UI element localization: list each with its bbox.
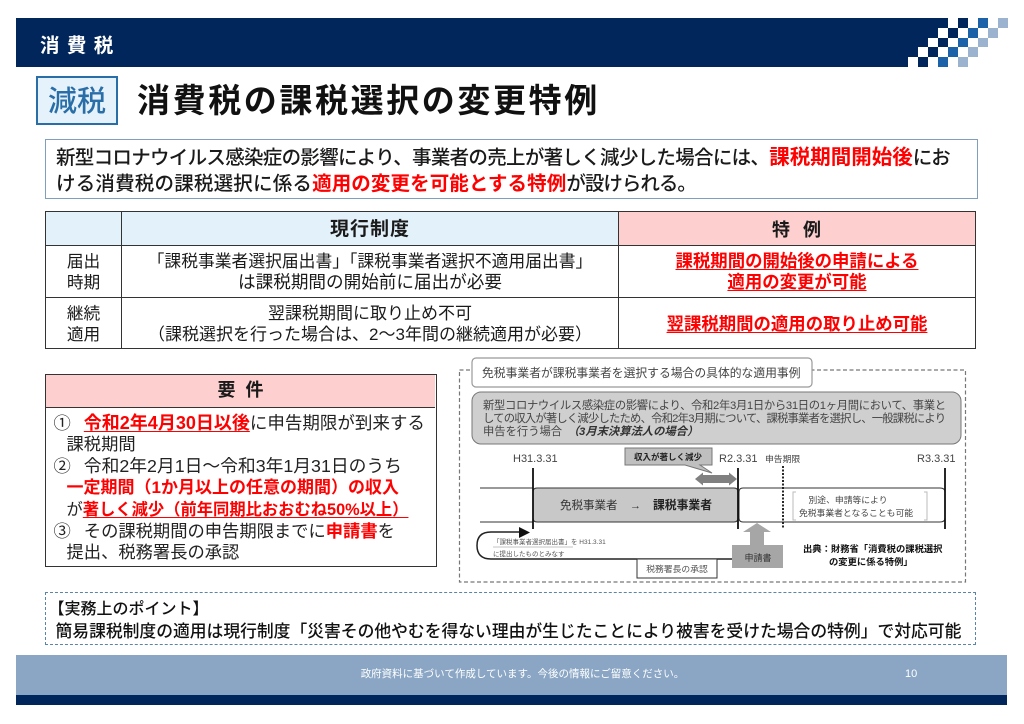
timeline following period bar [739, 488, 945, 522]
tax cut badge: 減税 [48, 86, 106, 118]
current system filing time: 「課税事業者選択届出書」「課税事業者選択不適用届出書」 [148, 252, 592, 271]
requirements panel [45, 374, 437, 567]
case description: 申告を行う場合 （3月末決算法人の場合） [483, 425, 698, 438]
special case filing time: 適用の変更が可能 [727, 272, 867, 292]
requirements heading: 要 件 [217, 380, 264, 400]
special case continued application [618, 297, 976, 349]
diagram heading: 免税事業者が課税事業者を選択する場合の具体的な適用事例 [482, 366, 801, 380]
table header special case: 特 例 [772, 220, 822, 240]
intro text box: 新型コロナウイルス感染症の影響により、事業者の売上が著しく減少した場合には、課税期間開始後にお [56, 146, 950, 169]
current system filing time [121, 245, 619, 298]
timeline tax-exempt to taxable bar: 免税事業者 [560, 498, 618, 512]
footer band [16, 655, 1007, 695]
special case filing time [618, 245, 976, 298]
row label continued application: 継続 [67, 304, 100, 323]
requirements list: ② 令和2年2月1日～令和3年1月31日のうち [54, 456, 402, 476]
application form arrow [732, 523, 783, 568]
application form arrow: 申請書 [744, 552, 772, 563]
footer note: 政府資料に基づいて作成しています。今後の情報にご留意ください。 [361, 668, 684, 680]
comparison table [45, 211, 976, 349]
timeline dates [513, 453, 956, 465]
intro text box: ける消費税の課税選択に係る適用の変更を可能とする特例が設けられる。 [56, 173, 696, 195]
practical points box [45, 592, 976, 645]
practical points text: 【実務上のポイント】 [48, 601, 209, 618]
practical points text: 簡易課税制度の適用は現行制度「災害その他やむを得ない理由が生じたことにより被害を受けた場合の特例」で対応可能 [56, 622, 961, 641]
current system continued application: 翌課税期間に取り止め不可 [268, 304, 472, 323]
requirements list: ③ その課税期間の申告期限までに申請書を [54, 521, 395, 541]
requirements list: ① 令和2年4月30日以後に申告期限が到来する [54, 413, 425, 433]
requirements list [54, 413, 425, 562]
revenue drop callout: 収入が著しく減少 [634, 452, 702, 462]
special case continued application: 翌課税期間の適用の取り止め可能 [667, 314, 927, 334]
requirements list: 一定期間（1か月以上の任意の期間）の収入 [66, 478, 399, 497]
current system filing time: は課税期間の開始前に届出が必要 [238, 272, 502, 292]
case description: しての収入が著しく減少したため、令和2年3月期について、課税事業者を選択し、一般課税により [483, 411, 946, 425]
timeline following period bar: 免税事業者となることも可能 [799, 507, 913, 518]
row label filing time: 時期 [67, 273, 100, 292]
case description: 新型コロナウイルス感染症の影響により、令和2年3月1日から31日の1ヶ月間において、事業と [483, 398, 946, 412]
case description [472, 392, 961, 444]
table header blank cell [45, 211, 122, 246]
timeline dates: 申告期限 [765, 453, 800, 464]
header band with checker pattern [16, 18, 1008, 67]
tax cut badge [36, 76, 118, 125]
approval return arrow: 「課税事業者選択届出書」を H31.3.31 [493, 537, 606, 546]
revenue drop callout [625, 448, 712, 473]
timeline tax-exempt to taxable bar: 課税事業者 [653, 498, 712, 512]
applied example diagram [458, 357, 966, 583]
tax office approval box: 税務署長の承認 [646, 563, 708, 574]
diagram heading [472, 358, 812, 387]
table header current system [121, 211, 619, 246]
timeline dates: R3.3.31 [917, 453, 956, 465]
source note: 出典：財務省「消費税の課税選択 [803, 543, 943, 554]
source note: の変更に係る特例」 [829, 556, 913, 567]
approval return arrow: に提出したものとみなす [493, 549, 565, 558]
timeline dates: H31.3.31 [513, 453, 558, 465]
footer navy strip [16, 695, 1007, 705]
requirements list: 課税期間 [66, 434, 136, 454]
vertical timeline markers [533, 466, 945, 529]
requirements heading [46, 375, 435, 408]
current system continued application: （課税選択を行った場合は、2～3年間の継続適用が必要） [148, 325, 592, 344]
row label continued application: 適用 [67, 325, 100, 344]
table header special case [618, 211, 976, 246]
section label: 消費税 [40, 35, 121, 57]
timeline dates: R2.3.31 [719, 453, 758, 465]
source note [803, 543, 943, 567]
title: 消費税の課税選択の変更特例 [137, 82, 600, 119]
double arrow [695, 472, 737, 486]
special case filing time: 課税期間の開始後の申請による [676, 251, 918, 271]
row label filing time: 届出 [67, 252, 100, 271]
requirements list: 提出、税務署長の承認 [66, 542, 239, 562]
requirements list: が著しく減少（前年同期比おおむね50%以上） [66, 501, 408, 519]
timeline following period bar: 別途、申請等により [808, 494, 888, 505]
timeline tax-exempt to taxable bar [480, 488, 738, 522]
current system continued application [121, 297, 619, 349]
row label filing time [45, 245, 122, 298]
row label continued application [45, 297, 122, 349]
approval return arrow [477, 527, 732, 559]
practical points text [48, 600, 961, 641]
intro text box [45, 139, 978, 199]
timeline tax-exempt to taxable bar: → [630, 500, 641, 512]
tax office approval box [637, 559, 717, 578]
page number: 10 [905, 668, 917, 680]
table header current system: 現行制度 [330, 219, 410, 240]
